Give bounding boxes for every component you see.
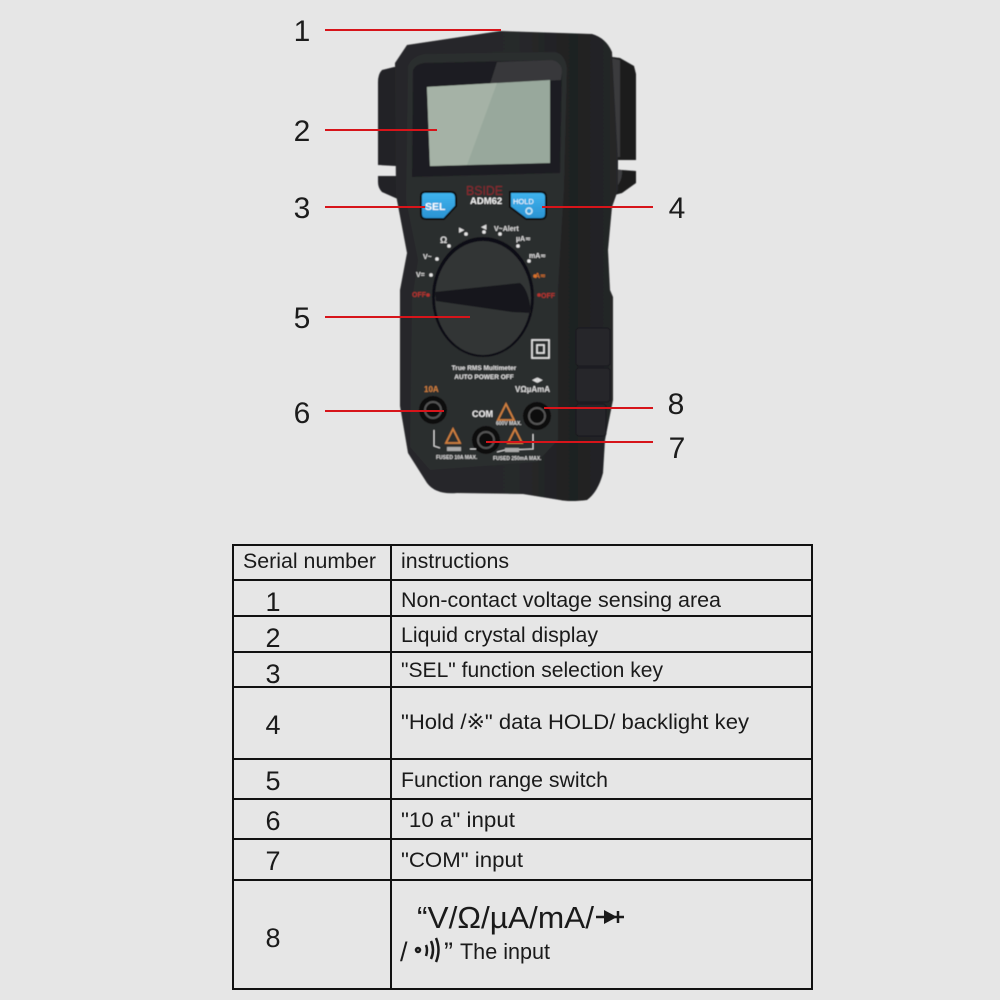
SEL key: SEL — [425, 201, 446, 213]
serial numbers: 1 — [265, 587, 281, 617]
serial numbers: 7 — [265, 846, 281, 876]
icon: diode — [596, 910, 624, 924]
brand: ADM62 — [470, 196, 502, 207]
dial labels: V~ — [423, 254, 432, 261]
dial labels: ▶ — [459, 227, 465, 234]
callout numbers: 7 — [669, 432, 685, 465]
input labels: ◀▶ — [532, 377, 543, 384]
callout numbers — [294, 15, 685, 465]
model caption — [452, 365, 517, 381]
model caption: True RMS Multimeter — [452, 365, 517, 372]
row 8 instruction: The input — [460, 939, 550, 964]
LCD screen — [427, 80, 550, 166]
serial numbers: 4 — [265, 710, 281, 740]
multimeter product photo — [378, 31, 636, 501]
dial labels: µA≂ — [516, 236, 531, 243]
row 8 instruction: ” — [444, 937, 453, 967]
dial labels: mA≂ — [529, 253, 546, 260]
row 8 instruction — [400, 900, 624, 967]
instructions: "SEL" function selection key — [401, 658, 663, 682]
dial labels: ◀ — [481, 224, 487, 231]
display bezel — [412, 60, 562, 177]
instructions — [401, 588, 749, 872]
instructions: Liquid crystal display — [401, 623, 598, 647]
serial numbers: 2 — [265, 623, 281, 653]
callout numbers: 4 — [669, 192, 685, 225]
HOLD key: HOLD — [513, 197, 534, 206]
warning triangles — [446, 404, 522, 443]
fuse traces and text: 600V MAX. — [496, 421, 522, 427]
callout numbers: 1 — [294, 15, 310, 48]
table — [233, 545, 812, 989]
table header: instructions — [401, 549, 509, 573]
icon: continuity beeper — [416, 938, 438, 962]
HOLD key — [510, 192, 546, 219]
dial labels: Ω — [440, 235, 447, 245]
input labels: COM — [472, 409, 493, 419]
double insulation symbol — [532, 340, 549, 358]
callout numbers: 8 — [668, 388, 684, 421]
input labels — [424, 377, 550, 419]
callout numbers: 2 — [294, 115, 310, 148]
SEL key — [421, 192, 456, 219]
callout lines — [325, 30, 653, 442]
dial labels: OFF — [541, 293, 556, 300]
row 8 instruction: / — [400, 937, 408, 967]
instructions: "COM" input — [401, 848, 523, 872]
dial dots — [426, 230, 541, 297]
fuse traces and text: FUSED 10A MAX. — [436, 455, 478, 461]
instructions: "10 a" input — [401, 808, 515, 832]
serial numbers: 3 — [265, 659, 281, 689]
table header: Serial number — [243, 549, 376, 573]
instructions: "Hold /※" data HOLD/ backlight key — [401, 710, 749, 734]
instructions: Function range switch — [401, 768, 608, 792]
front panel — [406, 52, 567, 470]
fuse traces and text: FUSED 250mA MAX. — [493, 456, 542, 462]
serial numbers: 8 — [265, 923, 281, 953]
brand: BSIDE — [466, 183, 503, 198]
serial numbers: 5 — [265, 766, 281, 796]
input labels: VΩµAmA — [515, 385, 550, 394]
right side clip — [594, 55, 636, 200]
serial numbers: 6 — [265, 806, 281, 836]
right side grip ribs — [576, 328, 610, 436]
callout numbers: 3 — [294, 192, 310, 225]
dial labels: V= — [416, 272, 425, 279]
dial labels: V~Alert — [494, 226, 519, 233]
dial labels: A≂ — [535, 273, 546, 280]
input labels: 10A — [424, 385, 439, 394]
brand — [466, 183, 503, 207]
instructions: Non-contact voltage sensing area — [401, 588, 721, 612]
fuse traces and text — [434, 421, 542, 462]
callout numbers: 6 — [294, 397, 310, 430]
meter body — [395, 31, 618, 501]
left side clip — [378, 67, 400, 200]
rotary dial — [432, 237, 534, 357]
jacks — [419, 396, 551, 454]
callout numbers: 5 — [294, 302, 310, 335]
dial labels — [412, 224, 556, 300]
dial labels: OFF — [412, 292, 427, 299]
table header — [243, 549, 509, 573]
row 8 instruction: “V/Ω/µA/mA/ — [417, 900, 594, 935]
model caption: AUTO POWER OFF — [454, 374, 514, 381]
serial numbers — [265, 587, 281, 953]
